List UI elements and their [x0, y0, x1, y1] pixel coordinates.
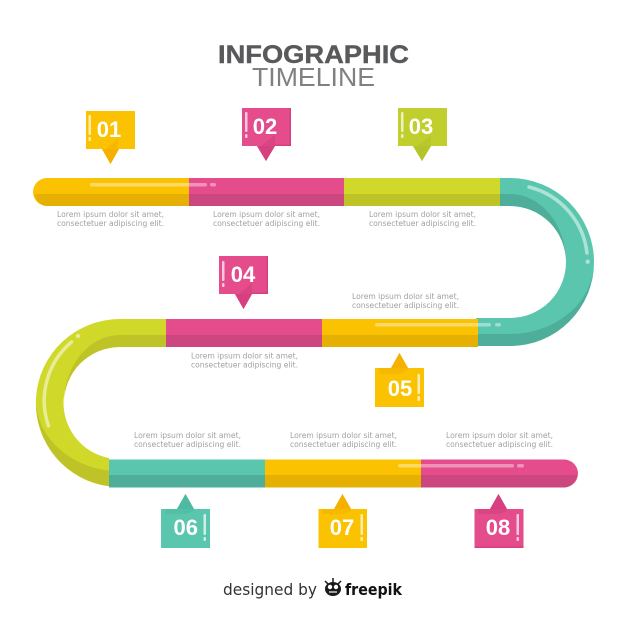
text block 05: Lorem ipsum dolor sit amet,: [352, 292, 459, 301]
text block 03: consectetuer adipiscing elit.: [369, 219, 476, 228]
text block 02: [213, 210, 320, 228]
text block 08: consectetuer adipiscing elit.: [446, 440, 553, 449]
marker 07: [318, 494, 367, 548]
timeline track: [33, 178, 594, 488]
text block 03: Lorem ipsum dolor sit amet,: [369, 210, 476, 219]
bottom bar: [109, 460, 578, 488]
text block 01: consectetuer adipiscing elit.: [57, 219, 164, 228]
text block 04: Lorem ipsum dolor sit amet,: [191, 352, 298, 360]
marker 03: [398, 108, 447, 161]
text block 08: [446, 431, 553, 449]
marker 05: [375, 353, 424, 407]
text block 06: consectetuer adipiscing elit.: [134, 440, 241, 449]
text block 01: [57, 210, 164, 228]
footer credit: [223, 578, 402, 599]
marker 02: [242, 108, 291, 161]
text block 04: consectetuer adipiscing elit.: [191, 360, 298, 370]
text block 04: [191, 352, 298, 370]
segment: left curve: [36, 319, 168, 486]
title: INFOGRAPHIC: [218, 41, 409, 69]
icon: freepik bee: [325, 578, 341, 596]
top bar: [33, 178, 500, 206]
text block 08: Lorem ipsum dolor sit amet,: [446, 431, 553, 440]
text block 06: [134, 431, 241, 449]
marker 06: [161, 494, 210, 548]
text block 07: consectetuer adipiscing elit.: [290, 440, 397, 449]
footer credit: freepik: [345, 580, 402, 599]
text block 05: consectetuer adipiscing elit.: [352, 301, 459, 310]
marker 01: 01: [97, 117, 121, 142]
marker 04: 04: [231, 262, 256, 287]
segment: right curve: [476, 178, 594, 346]
middle bar: [166, 319, 501, 347]
marker 08: [474, 494, 524, 548]
text block 02: consectetuer adipiscing elit.: [213, 219, 320, 228]
text block 05: [352, 292, 459, 310]
text block 06: Lorem ipsum dolor sit amet,: [134, 431, 241, 440]
title: [218, 41, 409, 92]
marker 08: 08: [486, 515, 510, 540]
marker 02: 02: [253, 114, 277, 139]
title: TIMELINE: [252, 62, 375, 92]
marker 05: 05: [388, 376, 412, 401]
marker 06: 06: [173, 515, 198, 540]
text block 07: Lorem ipsum dolor sit amet,: [290, 431, 397, 440]
footer credit: designed by: [223, 580, 317, 599]
marker 01: [86, 111, 135, 164]
marker 03: 03: [409, 114, 433, 139]
text block 02: Lorem ipsum dolor sit amet,: [213, 210, 320, 219]
marker 07: 07: [330, 515, 354, 540]
text block 07: [290, 431, 397, 449]
text block 03: [369, 210, 476, 228]
marker 04: [219, 256, 268, 309]
text block 01: Lorem ipsum dolor sit amet,: [57, 210, 164, 219]
